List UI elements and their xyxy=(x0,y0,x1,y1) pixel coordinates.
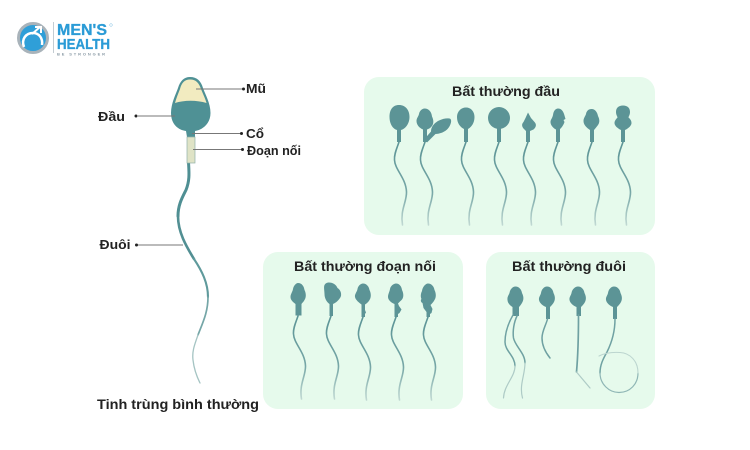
caption: normal sperm: Tinh trùng bình thường xyxy=(97,397,259,412)
sperm: short tail xyxy=(539,286,555,358)
sperm: kinked tail xyxy=(569,286,590,388)
sperm: pointed small head xyxy=(522,112,536,225)
leader dots xyxy=(134,88,245,246)
sperm: thick midpiece xyxy=(290,283,306,399)
acrosome cap xyxy=(175,80,206,103)
label: Mũ: Mũ xyxy=(246,81,266,96)
sperm: bilobed head xyxy=(614,106,632,225)
sperm: pear head xyxy=(584,109,600,225)
sperm: double head xyxy=(416,108,451,225)
panel: head abnormalities xyxy=(364,77,655,235)
logo: Men's Health xyxy=(18,22,112,56)
head of normal sperm xyxy=(171,77,210,137)
sperm: bent neck xyxy=(324,282,341,399)
label: Đoạn nối: Đoạn nối xyxy=(247,143,301,158)
sperm: large head xyxy=(390,105,410,225)
sperm: thin midpiece with small bump xyxy=(355,284,371,400)
sperm: notched head xyxy=(550,108,566,225)
diagram: normal sperm xyxy=(97,77,301,412)
heading: Bất thường đoạn nối xyxy=(294,259,436,274)
midpiece xyxy=(187,137,195,163)
sperm: double tail xyxy=(504,286,525,398)
sperm: midpiece side bump xyxy=(388,284,404,400)
sperm: coiled tail xyxy=(599,286,638,392)
logo: Men's Health: HEALTH xyxy=(57,37,110,53)
label: Cổ: Cổ xyxy=(246,126,264,141)
heading: Bất thường đầu xyxy=(452,84,560,99)
sperm: round pear head xyxy=(457,108,474,225)
label: Đầu: Đầu xyxy=(98,109,125,124)
panel: midpiece abnormalities xyxy=(263,252,463,409)
sperm: round head xyxy=(488,107,510,225)
leader lines xyxy=(137,89,243,245)
logo: Men's Health: MEN'S xyxy=(57,22,107,39)
sperm: notched head with midpiece bump xyxy=(421,284,436,400)
label: Đuôi: Đuôi xyxy=(100,237,130,252)
panel: tail abnormalities xyxy=(486,252,655,409)
heading: Bất thường đuôi xyxy=(512,259,626,274)
logo: Men's Health: BE STRONGER xyxy=(57,52,105,56)
tail of normal sperm xyxy=(178,162,208,383)
